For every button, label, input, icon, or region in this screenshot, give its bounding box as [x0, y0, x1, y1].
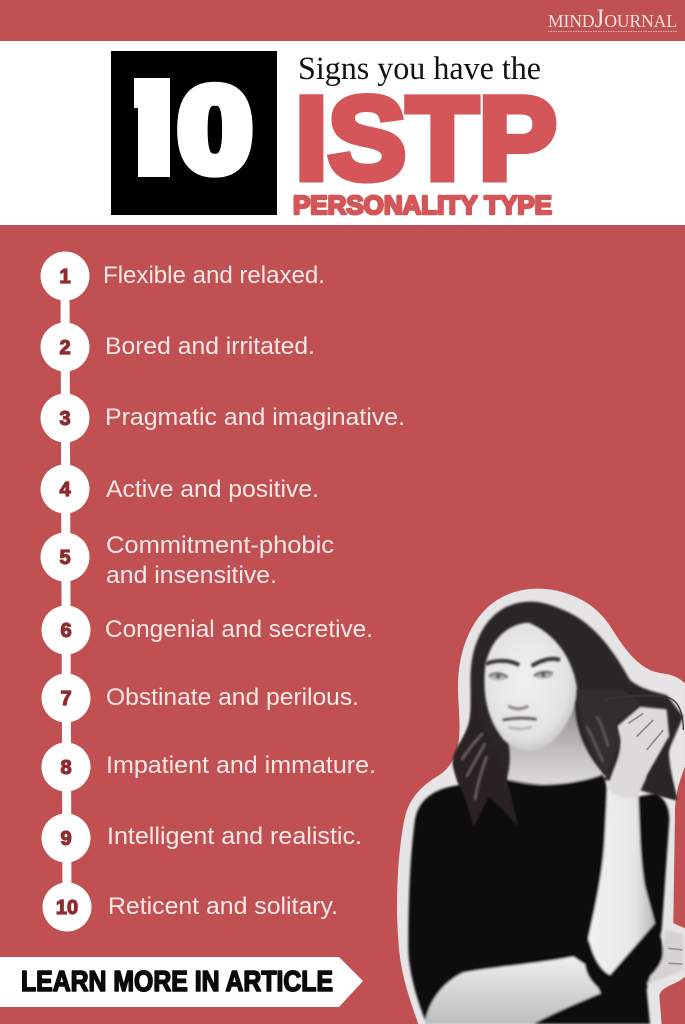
list item 4 — [40, 464, 319, 514]
photo: woman with white cut-out outline — [397, 589, 685, 1024]
front hair left — [453, 690, 518, 828]
list item 5: 5 — [59, 547, 71, 569]
list item 9: Intelligent and realistic. — [107, 823, 362, 850]
sleeve cuff — [585, 923, 663, 993]
logo: MindJournal: MINDJOURNAL — [548, 4, 677, 33]
heading: personality type: PERSONALITY TYPE — [293, 190, 552, 220]
top — [408, 774, 669, 1024]
hair strand and finger lines — [603, 696, 683, 964]
list item 8: 8 — [60, 757, 72, 779]
list item 9 — [42, 814, 362, 862]
heading: signs you have the: Signs you have the — [298, 51, 541, 87]
list item 7: Obstinate and perilous. — [106, 684, 359, 711]
list item 3 — [40, 394, 405, 442]
back hair — [453, 602, 683, 828]
list item 5: Commitment-phobic — [106, 532, 334, 559]
heading: ISTP: ISTP — [295, 73, 557, 205]
list item 2 — [40, 322, 315, 372]
list item 6: Congenial and secretive. — [105, 616, 373, 643]
list item 1: Flexible and relaxed. — [103, 262, 325, 289]
raised hand — [607, 707, 669, 798]
list item 5: and insensitive. — [106, 562, 277, 589]
call to action arrow banner: LEARN MORE IN ARTICLE — [21, 966, 333, 998]
list item 7: 7 — [60, 688, 72, 710]
list item 6 — [42, 606, 373, 654]
list item 10: Reticent and solitary. — [108, 893, 338, 920]
list item 2: 2 — [59, 337, 71, 359]
forearm — [588, 787, 655, 975]
list item 9: 9 — [60, 828, 72, 850]
list item 5 — [40, 532, 334, 589]
list item 8 — [42, 742, 376, 792]
numbered list connector line — [65, 276, 67, 907]
neck — [507, 703, 607, 785]
face — [484, 623, 577, 751]
list item 10: 10 — [56, 897, 78, 919]
folded arm — [425, 957, 601, 1024]
facial features — [486, 659, 560, 729]
call to action arrow banner — [0, 957, 363, 1007]
list item 8: Impatient and immature. — [106, 752, 376, 779]
list item 1: 1 — [59, 266, 71, 288]
list item 10 — [42, 882, 338, 932]
list item 4: Active and positive. — [106, 476, 319, 503]
list item 2: Bored and irritated. — [105, 333, 315, 360]
list item 1 — [40, 252, 325, 300]
badge: number 10: 1 — [120, 63, 187, 197]
badge: number 10: 0 — [178, 63, 252, 197]
list item 3: Pragmatic and imaginative. — [105, 404, 405, 431]
badge: number 10 — [111, 51, 277, 215]
list item 4: 4 — [59, 479, 71, 501]
header band — [0, 41, 685, 225]
fingers at elbow — [647, 930, 683, 985]
front hair right — [577, 690, 640, 777]
list item 3: 3 — [59, 408, 71, 430]
list item 7 — [42, 674, 359, 722]
list item 6: 6 — [60, 620, 72, 642]
